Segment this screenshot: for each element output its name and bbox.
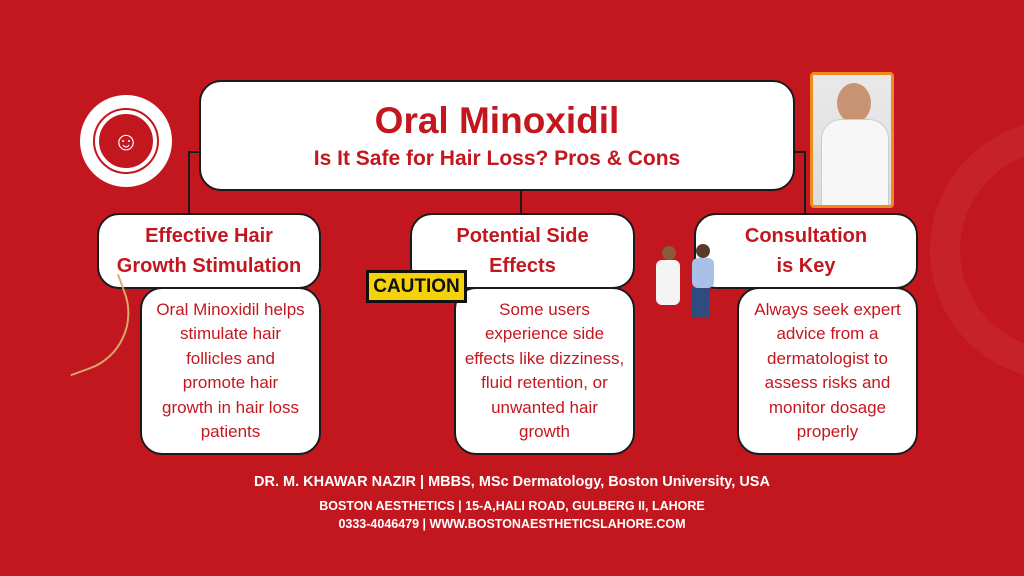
title: Is It Safe for Hair Loss? Pros & Cons [314,146,680,170]
panel: hair growth: Effective Hair [145,225,273,247]
title [199,80,795,191]
footer: DR. M. KHAWAR NAZIR | MBBS, MSc Dermatology, Boston University, USA [254,474,770,490]
icon: consultation figures [656,244,714,318]
panel: hair growth [97,213,321,289]
text: fluid retention, or [481,373,608,392]
text: unwanted hair [491,398,598,416]
text: effects like dizziness, [465,348,624,368]
icon: hair strands [44,274,146,376]
icon: caution sign [366,270,467,303]
text: patients [201,422,260,441]
text: promote hair [183,373,278,392]
text: growth in hair loss [162,398,299,416]
text: Always seek expert [754,300,901,318]
logo [80,95,172,187]
text: growth [519,422,570,441]
icon: caution sign: CAUTION [373,276,460,297]
text: experience side [485,324,604,343]
connectors [188,151,200,153]
title: Oral Minoxidil [375,100,619,140]
text: advice from a [776,324,879,343]
panel: consultation: Consultation [745,225,867,247]
text: 0333-4046479 | WWW.BOSTONAESTHETICSLAHORE.COM [338,517,686,531]
text: Some users [499,300,590,318]
text: stimulate hair [180,324,281,343]
text: follicles and [186,348,275,368]
watermark circles [930,120,1024,380]
doctor photo [810,72,894,208]
panel: side effects [410,213,635,289]
panel: side effects: Effects [489,255,556,277]
text: Oral Minoxidil helps [156,300,305,318]
logo: ☺ [113,126,139,156]
panel: hair growth: Growth Stimulation [117,255,301,277]
panel: consultation: is Key [777,255,835,277]
panel: side effects: Potential Side [456,225,589,247]
text: monitor dosage [769,398,886,416]
text: BOSTON AESTHETICS | 15-A,HALI ROAD, GULBERG II, LAHORE [319,499,705,513]
panel: consultation [694,213,918,289]
text: dermatologist to [767,348,888,368]
text: properly [797,422,858,441]
text: assess risks and [765,373,890,392]
